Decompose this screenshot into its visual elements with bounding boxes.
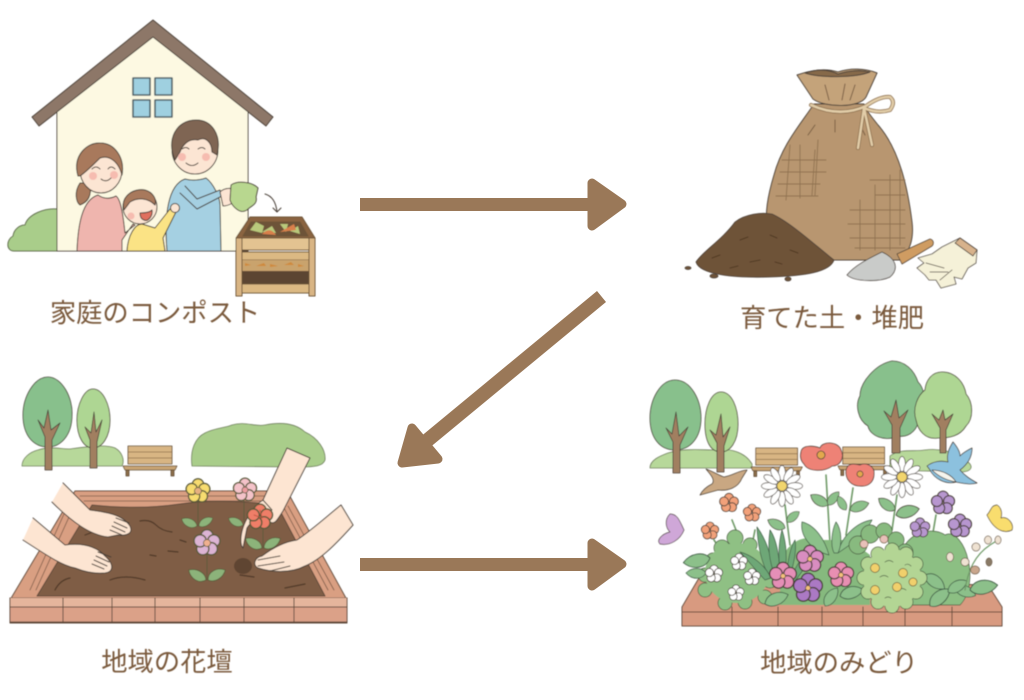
icon: bench: [751, 448, 802, 476]
icon: gloves: [917, 238, 977, 288]
arrow: flower bed to community greenery: [360, 543, 622, 586]
icon: trowel: [847, 239, 933, 281]
label: grown soil and compost: 育てた土・堆肥: [740, 303, 924, 333]
icon: brick planter: [682, 578, 1002, 626]
icon: brown bird: [700, 469, 747, 495]
icon: round tree: [858, 361, 924, 453]
icon: left hands: [23, 483, 131, 573]
label: home compost: 家庭のコンポスト: [50, 298, 260, 328]
icon: father: [166, 120, 258, 251]
icon: round tree: [915, 372, 972, 453]
icon: child: [123, 190, 180, 251]
icon: butterflies: [659, 505, 1012, 544]
icon: stems: [714, 475, 936, 560]
icon: bench: [838, 447, 889, 476]
icon: house roof: [32, 20, 273, 126]
icon: low hedge: [22, 446, 123, 466]
panel: community flower bed: [10, 377, 353, 677]
icon: tree: [650, 380, 701, 473]
panel: community greenery: [650, 361, 1012, 678]
icon: red poppies: [800, 443, 874, 486]
icon: foliage left: [698, 530, 778, 610]
icon: low hedge left: [650, 450, 752, 468]
icon: tree: [23, 377, 72, 470]
icon: large hedge: [192, 423, 325, 467]
icon: lily of the valley: [946, 536, 1001, 590]
icon: purple flower: [186, 530, 228, 585]
icon: blue bird: [927, 442, 977, 484]
icon: yellow blossoms: [860, 535, 917, 594]
icon: daisies: [762, 456, 922, 506]
icon: yellow flower: [180, 479, 215, 530]
icon: soil pile: [685, 213, 834, 281]
panel: grown soil and compost: [685, 69, 977, 333]
arrow: soil to flower bed: [402, 291, 606, 463]
icon: upper leaves: [766, 489, 921, 533]
panel: home compost: [8, 20, 315, 328]
icon: compost bin: [236, 217, 315, 296]
icon: purple flowers: [910, 491, 972, 537]
icon: tree: [705, 392, 738, 472]
icon: white flowers: [705, 553, 760, 600]
icon: pink flowers: [770, 545, 854, 601]
icon: drop arrow: [265, 194, 281, 212]
arrow: compost to soil: [360, 183, 622, 226]
icon: right upper hand: [241, 448, 310, 548]
icon: bench: [123, 446, 177, 476]
soil: [37, 501, 325, 596]
icon: tree: [77, 389, 110, 468]
icon: foliage centre: [780, 538, 870, 605]
icon: orange flowers: [701, 493, 761, 539]
icon: round shrub: [857, 543, 927, 613]
icon: brick planter: [10, 491, 347, 623]
icon: house wall: [57, 30, 248, 251]
icon: mother: [76, 143, 135, 251]
icon: burlap bag: [766, 69, 912, 260]
icon: garden bush: [8, 209, 57, 251]
icon: right lower hand: [234, 505, 353, 574]
icon: large leaves: [682, 520, 999, 610]
icon: foliage right: [905, 531, 970, 605]
icon: window: [133, 78, 172, 117]
icon: low hedge right: [890, 449, 971, 472]
label: community greenery: 地域のみどり: [760, 648, 918, 678]
icon: top shrub: [849, 523, 913, 560]
icon: spiky leaves: [740, 527, 810, 582]
icon: red flower: [243, 504, 283, 552]
label: community flower bed: 地域の花壇: [101, 647, 233, 677]
icon: pink flower: [227, 478, 257, 529]
